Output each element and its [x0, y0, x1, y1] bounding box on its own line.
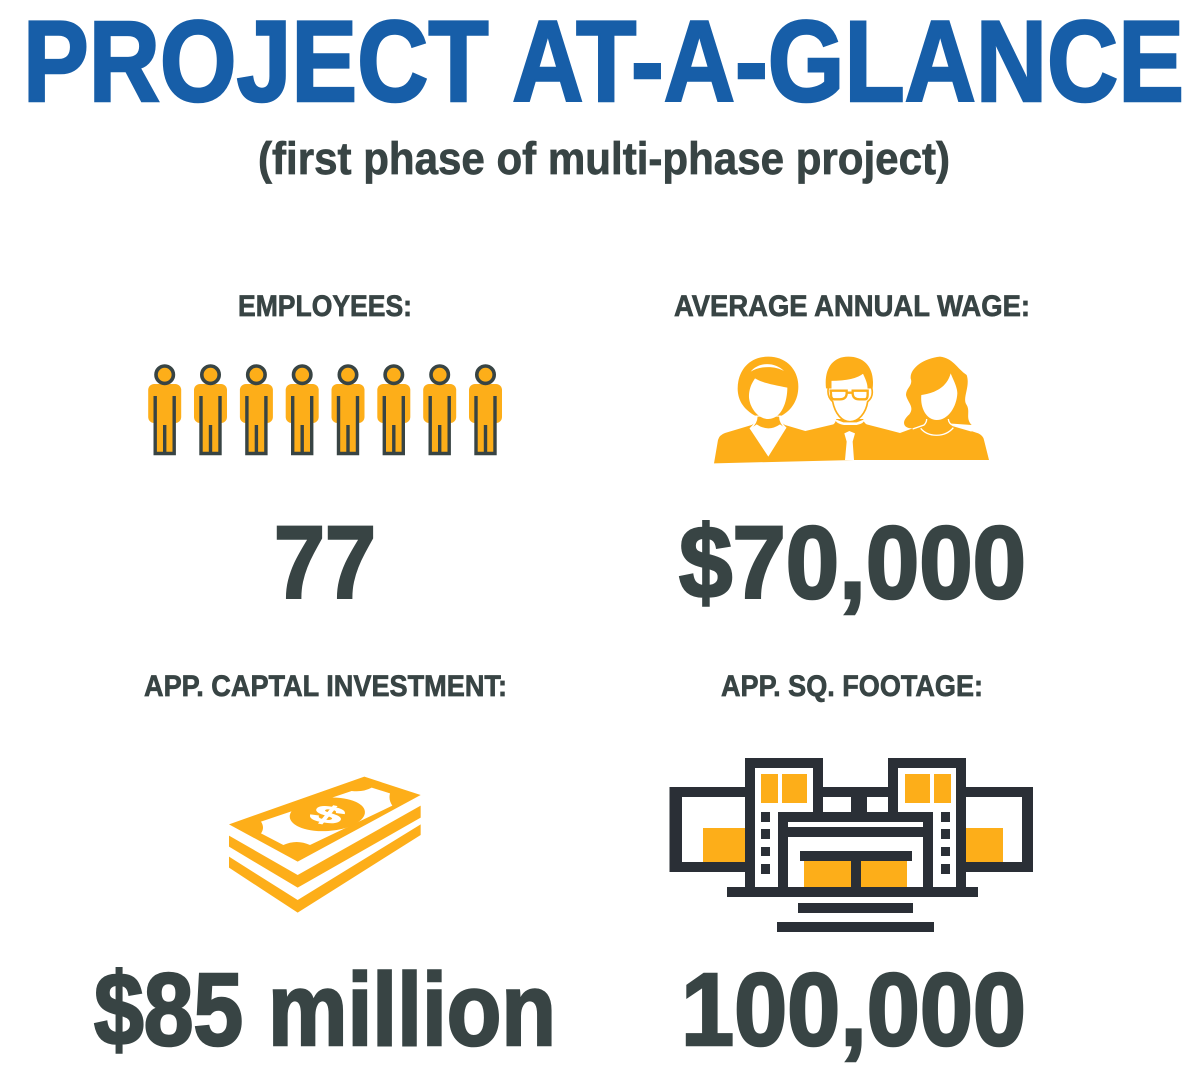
employees value: 77 — [274, 505, 376, 620]
panel: average annual wage — [674, 290, 1030, 620]
wage value: $70,000 — [679, 505, 1026, 620]
investment label: APP. CAPTAL INVESTMENT: — [144, 670, 507, 703]
panel: square footage — [670, 670, 1033, 1067]
footage label: APP. SQ. FOOTAGE: — [721, 670, 983, 703]
footage value: 100,000 — [681, 952, 1026, 1067]
icon: office buildings — [670, 758, 1033, 932]
panel: capital investment — [94, 670, 556, 1067]
icon: row of eight people — [148, 366, 502, 454]
investment value: $85 million — [94, 952, 556, 1067]
icon: stack of money: $ — [303, 800, 353, 830]
icon: stack of money — [229, 777, 421, 913]
subtitle: (first phase of multi-phase project) — [258, 133, 950, 184]
employees label: EMPLOYEES: — [238, 290, 412, 323]
wage label: AVERAGE ANNUAL WAGE: — [674, 290, 1030, 323]
icon: three professionals — [714, 357, 989, 463]
panel: employees — [148, 290, 502, 620]
